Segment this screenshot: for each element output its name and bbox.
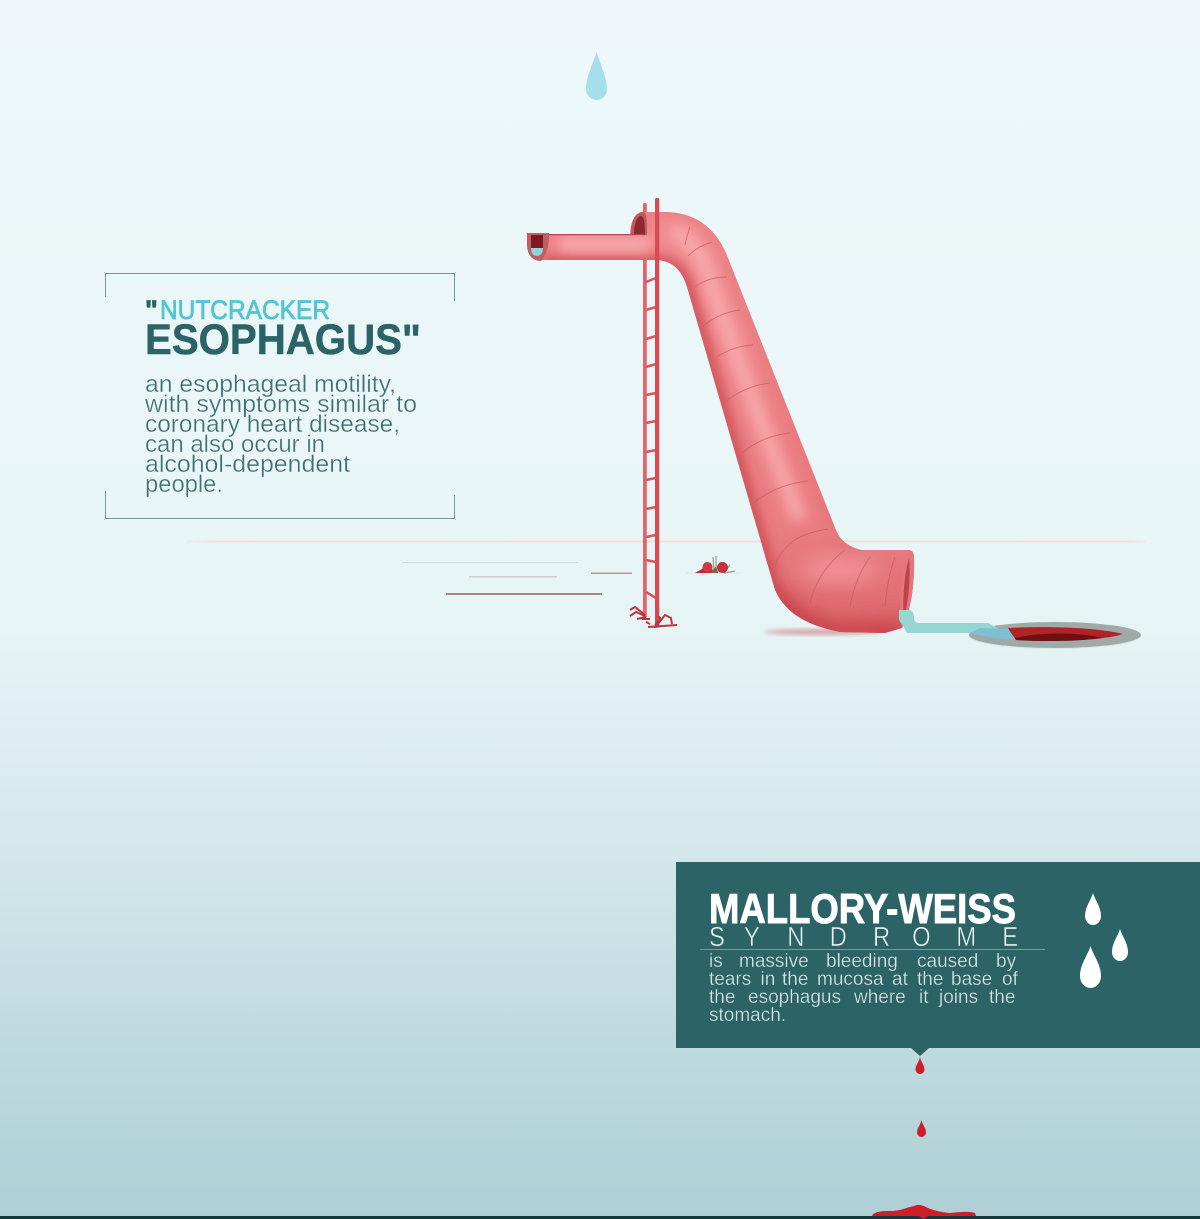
water stream into drain xyxy=(899,610,1141,649)
blood puddle xyxy=(872,1205,976,1219)
ladder: front rail and rungs xyxy=(646,198,659,626)
icon: white drops xyxy=(1080,893,1128,988)
description: at xyxy=(892,969,909,990)
tube top opening xyxy=(631,212,647,235)
description: it xyxy=(919,987,929,1008)
body text: can also occur in xyxy=(145,431,325,458)
heading: nutcracker esophagus: " xyxy=(145,295,158,325)
description: where xyxy=(853,987,906,1008)
heading: nutcracker esophagus xyxy=(145,295,421,364)
icon: blood drops xyxy=(916,1057,926,1137)
body text: people. xyxy=(145,471,223,498)
lower bend shade xyxy=(778,592,905,632)
pipe mouth with water xyxy=(527,233,549,261)
body text: an esophageal motility, xyxy=(145,371,396,398)
description: the xyxy=(917,969,943,990)
description: massive xyxy=(739,951,809,972)
ladder: back rail xyxy=(643,203,647,618)
tube lower outlet xyxy=(900,550,914,628)
description: caused xyxy=(917,951,978,972)
right and top edge shading xyxy=(530,210,862,550)
subheading: syndrome: SYNDROME xyxy=(709,920,1018,952)
heading: nutcracker esophagus: NUTCRACKER xyxy=(160,295,330,325)
description: esophagus xyxy=(748,987,841,1008)
ground line xyxy=(186,540,1146,542)
illustration: esophagus tube xyxy=(520,205,920,640)
description: by xyxy=(996,951,1017,972)
tube contact shadow xyxy=(764,629,880,635)
description: tears xyxy=(709,969,751,990)
description: the xyxy=(782,969,808,990)
muscle ring lines xyxy=(685,227,895,607)
description: bleeding xyxy=(826,951,898,972)
ground shadow streaks xyxy=(402,562,632,595)
heading: mallory-weiss: MALLORY-WEISS xyxy=(709,885,1016,932)
description: stomach. xyxy=(709,1005,786,1026)
description: joins xyxy=(938,987,978,1008)
description: is xyxy=(709,951,723,972)
icon: strawberries on ground xyxy=(686,556,740,574)
description: in xyxy=(760,969,775,990)
bottom floor bar xyxy=(0,1216,1200,1219)
body text xyxy=(144,371,417,498)
description: the xyxy=(709,987,735,1008)
body text: alcohol-dependent xyxy=(145,451,350,478)
description: the xyxy=(989,987,1015,1008)
frame brackets xyxy=(106,274,454,518)
highlights along the tube xyxy=(560,232,800,520)
description: mucosa xyxy=(817,969,884,990)
divider xyxy=(700,949,1045,950)
water xyxy=(899,610,1000,633)
drain red interior xyxy=(1008,627,1123,641)
icon: falling water drop xyxy=(586,52,607,100)
body text: coronary heart disease, xyxy=(145,411,400,438)
left edge shading xyxy=(540,262,905,634)
ladder feet xyxy=(630,607,677,627)
panel: mallory-weiss syndrome xyxy=(676,862,1200,1056)
panel: nutcracker esophagus xyxy=(106,274,454,518)
heading: nutcracker esophagus: ESOPHAGUS" xyxy=(145,316,421,364)
tube top edge line xyxy=(549,234,644,235)
drain xyxy=(969,623,1141,649)
description: base xyxy=(951,969,992,990)
description: of xyxy=(1002,969,1019,990)
body text: with symptoms similar to xyxy=(144,391,417,418)
